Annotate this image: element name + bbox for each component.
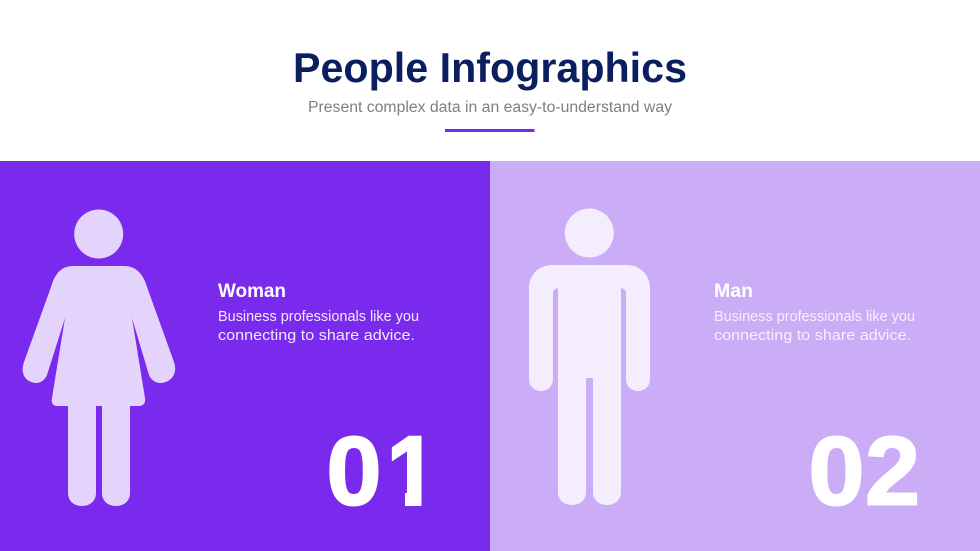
header: [293, 44, 687, 132]
panel background: woman: [0, 161, 490, 551]
description: man: Business professionals like you: [714, 308, 915, 325]
panel: man: [490, 161, 980, 551]
icon: man figure: [529, 208, 650, 505]
panel: woman: [0, 161, 490, 551]
title underline: [445, 129, 534, 132]
panel background: man: [490, 161, 980, 551]
description: woman: [218, 308, 419, 344]
description: woman: Business professionals like you: [218, 308, 419, 325]
number 01: 0: [326, 416, 382, 526]
title: People Infographics: [293, 44, 687, 91]
number 02: [808, 416, 920, 526]
description: woman: connecting to share advice.: [218, 327, 415, 344]
heading: woman: Woman: [218, 281, 286, 302]
subtitle: Present complex data in an easy-to-understand way: [308, 99, 672, 116]
number 02: 2: [865, 416, 920, 526]
number 01: 1: [387, 416, 438, 526]
heading: man: Man: [714, 281, 753, 302]
icon: woman figure: [23, 210, 175, 506]
description: man: connecting to share advice.: [714, 327, 911, 344]
description: man: [714, 308, 915, 344]
number 02: 0: [808, 416, 864, 526]
number 01: [329, 436, 422, 506]
